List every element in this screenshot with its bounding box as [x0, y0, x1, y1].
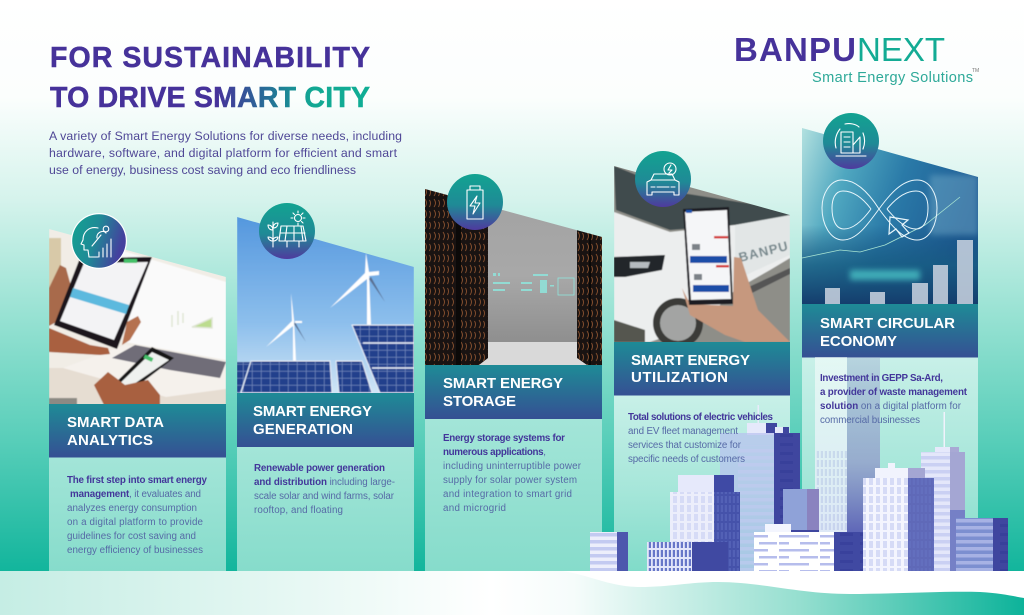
description: energy efficiency of businesses [67, 545, 203, 556]
logo [734, 31, 979, 86]
photo: tablet and phone analytics [49, 225, 226, 405]
description: rooftop, and floating [254, 505, 343, 516]
building: white tower [863, 463, 934, 571]
building: white low [754, 524, 863, 571]
panel: smart energy utilization [614, 151, 790, 572]
description: guidelines for cost saving and [67, 531, 196, 542]
section header [802, 304, 978, 358]
photo: electric car and phone app: BANPU [737, 238, 789, 265]
icon: analytics head [71, 213, 127, 269]
title [50, 42, 370, 114]
photo: battery storage room [425, 185, 602, 367]
section header [49, 404, 226, 458]
icon: city and recycling [823, 113, 879, 169]
description text: smart circular economy: a provider of waste management [820, 387, 968, 398]
building: small left [590, 532, 628, 571]
photo: wind turbines and solar panels [237, 215, 414, 395]
description: management, it evaluates and [70, 489, 201, 500]
building: back tower [720, 405, 800, 571]
description [49, 458, 226, 572]
description: scale solar and wind farms, solar [254, 491, 395, 502]
description: analyzes energy consumption [67, 503, 197, 514]
city skyline [590, 357, 1008, 571]
intro text: A variety of Smart Energy Solutions for diverse needs, including [49, 129, 402, 143]
panel: smart circular economy [802, 113, 978, 572]
building: glass block [783, 489, 819, 542]
logo: Smart Energy Solutions [812, 70, 973, 86]
description: including uninterruptible power [443, 461, 582, 472]
description: The first step into smart energy [67, 475, 208, 486]
section header [237, 393, 414, 447]
intro text: use of energy, business cost saving and eco friendliness [49, 163, 356, 177]
section header: SMART ENERGY [631, 352, 750, 369]
description: Energy storage systems for [443, 433, 565, 444]
building: right tower [921, 412, 965, 571]
logo: BANPU [734, 31, 856, 68]
tall translucent tower [815, 357, 880, 532]
description text: smart energy utilization [628, 412, 774, 465]
title: FOR SUSTAINABILITY [50, 42, 370, 74]
description background [802, 358, 978, 572]
intro text [49, 129, 402, 177]
panel: smart data analytics [49, 213, 226, 572]
description background [614, 396, 790, 572]
description text: smart circular economy [820, 373, 968, 426]
photo: circular economy infinity graphic [802, 125, 978, 305]
building: right low [956, 518, 1008, 571]
section header: SMART CIRCULAR [820, 315, 955, 332]
description text: smart energy utilization: specific needs of customers [628, 454, 745, 465]
intro text: hardware, software, and digital platform for efficient and smart [49, 146, 398, 160]
icon: electric car [635, 151, 691, 207]
title: TO DRIVE SMART CITY [50, 82, 370, 114]
building: mid-rise [670, 475, 740, 571]
description: Renewable power generation [254, 463, 385, 474]
description: supply for solar power system [443, 475, 577, 486]
description text: smart energy utilization: and EV fleet management [628, 426, 738, 437]
description [237, 447, 414, 572]
description text: smart energy utilization: Total solutions of electric vehicles [628, 412, 774, 423]
panel: smart energy storage [425, 174, 602, 572]
panel: smart energy generation [237, 203, 414, 572]
description: and integration to smart grid [443, 489, 572, 500]
description text: smart circular economy: commercial businesses [820, 415, 920, 426]
description: and microgrid [443, 503, 506, 514]
icon: battery [447, 174, 503, 230]
section header [425, 365, 602, 419]
section header: SMART DATA [67, 414, 164, 431]
description text: smart circular economy: Investment in GEPP Sa-Ard, [820, 373, 943, 384]
section header: SMART ENERGY [253, 403, 372, 420]
description [425, 419, 602, 572]
section header [614, 342, 790, 396]
description: on a digital platform to provide [67, 517, 204, 528]
section header: STORAGE [443, 393, 516, 410]
section header: ECONOMY [820, 333, 897, 350]
description: and distribution including large- [254, 477, 395, 488]
section header: ANALYTICS [67, 432, 153, 449]
description: numerous applications, [443, 447, 546, 458]
description text: smart energy utilization: services that customize for [628, 440, 742, 451]
photo: electric car and phone app [614, 160, 790, 348]
building: low front [647, 542, 728, 571]
section header: SMART ENERGY [443, 375, 563, 392]
bottom wave band [0, 571, 1024, 615]
description text: smart circular economy: solution on a digital platform for [820, 401, 962, 412]
logo: NEXT [857, 31, 945, 68]
section header: UTILIZATION [631, 369, 728, 386]
logo: TM [972, 68, 979, 74]
icon: solar panel and plants [259, 203, 315, 259]
section header: GENERATION [253, 421, 353, 438]
